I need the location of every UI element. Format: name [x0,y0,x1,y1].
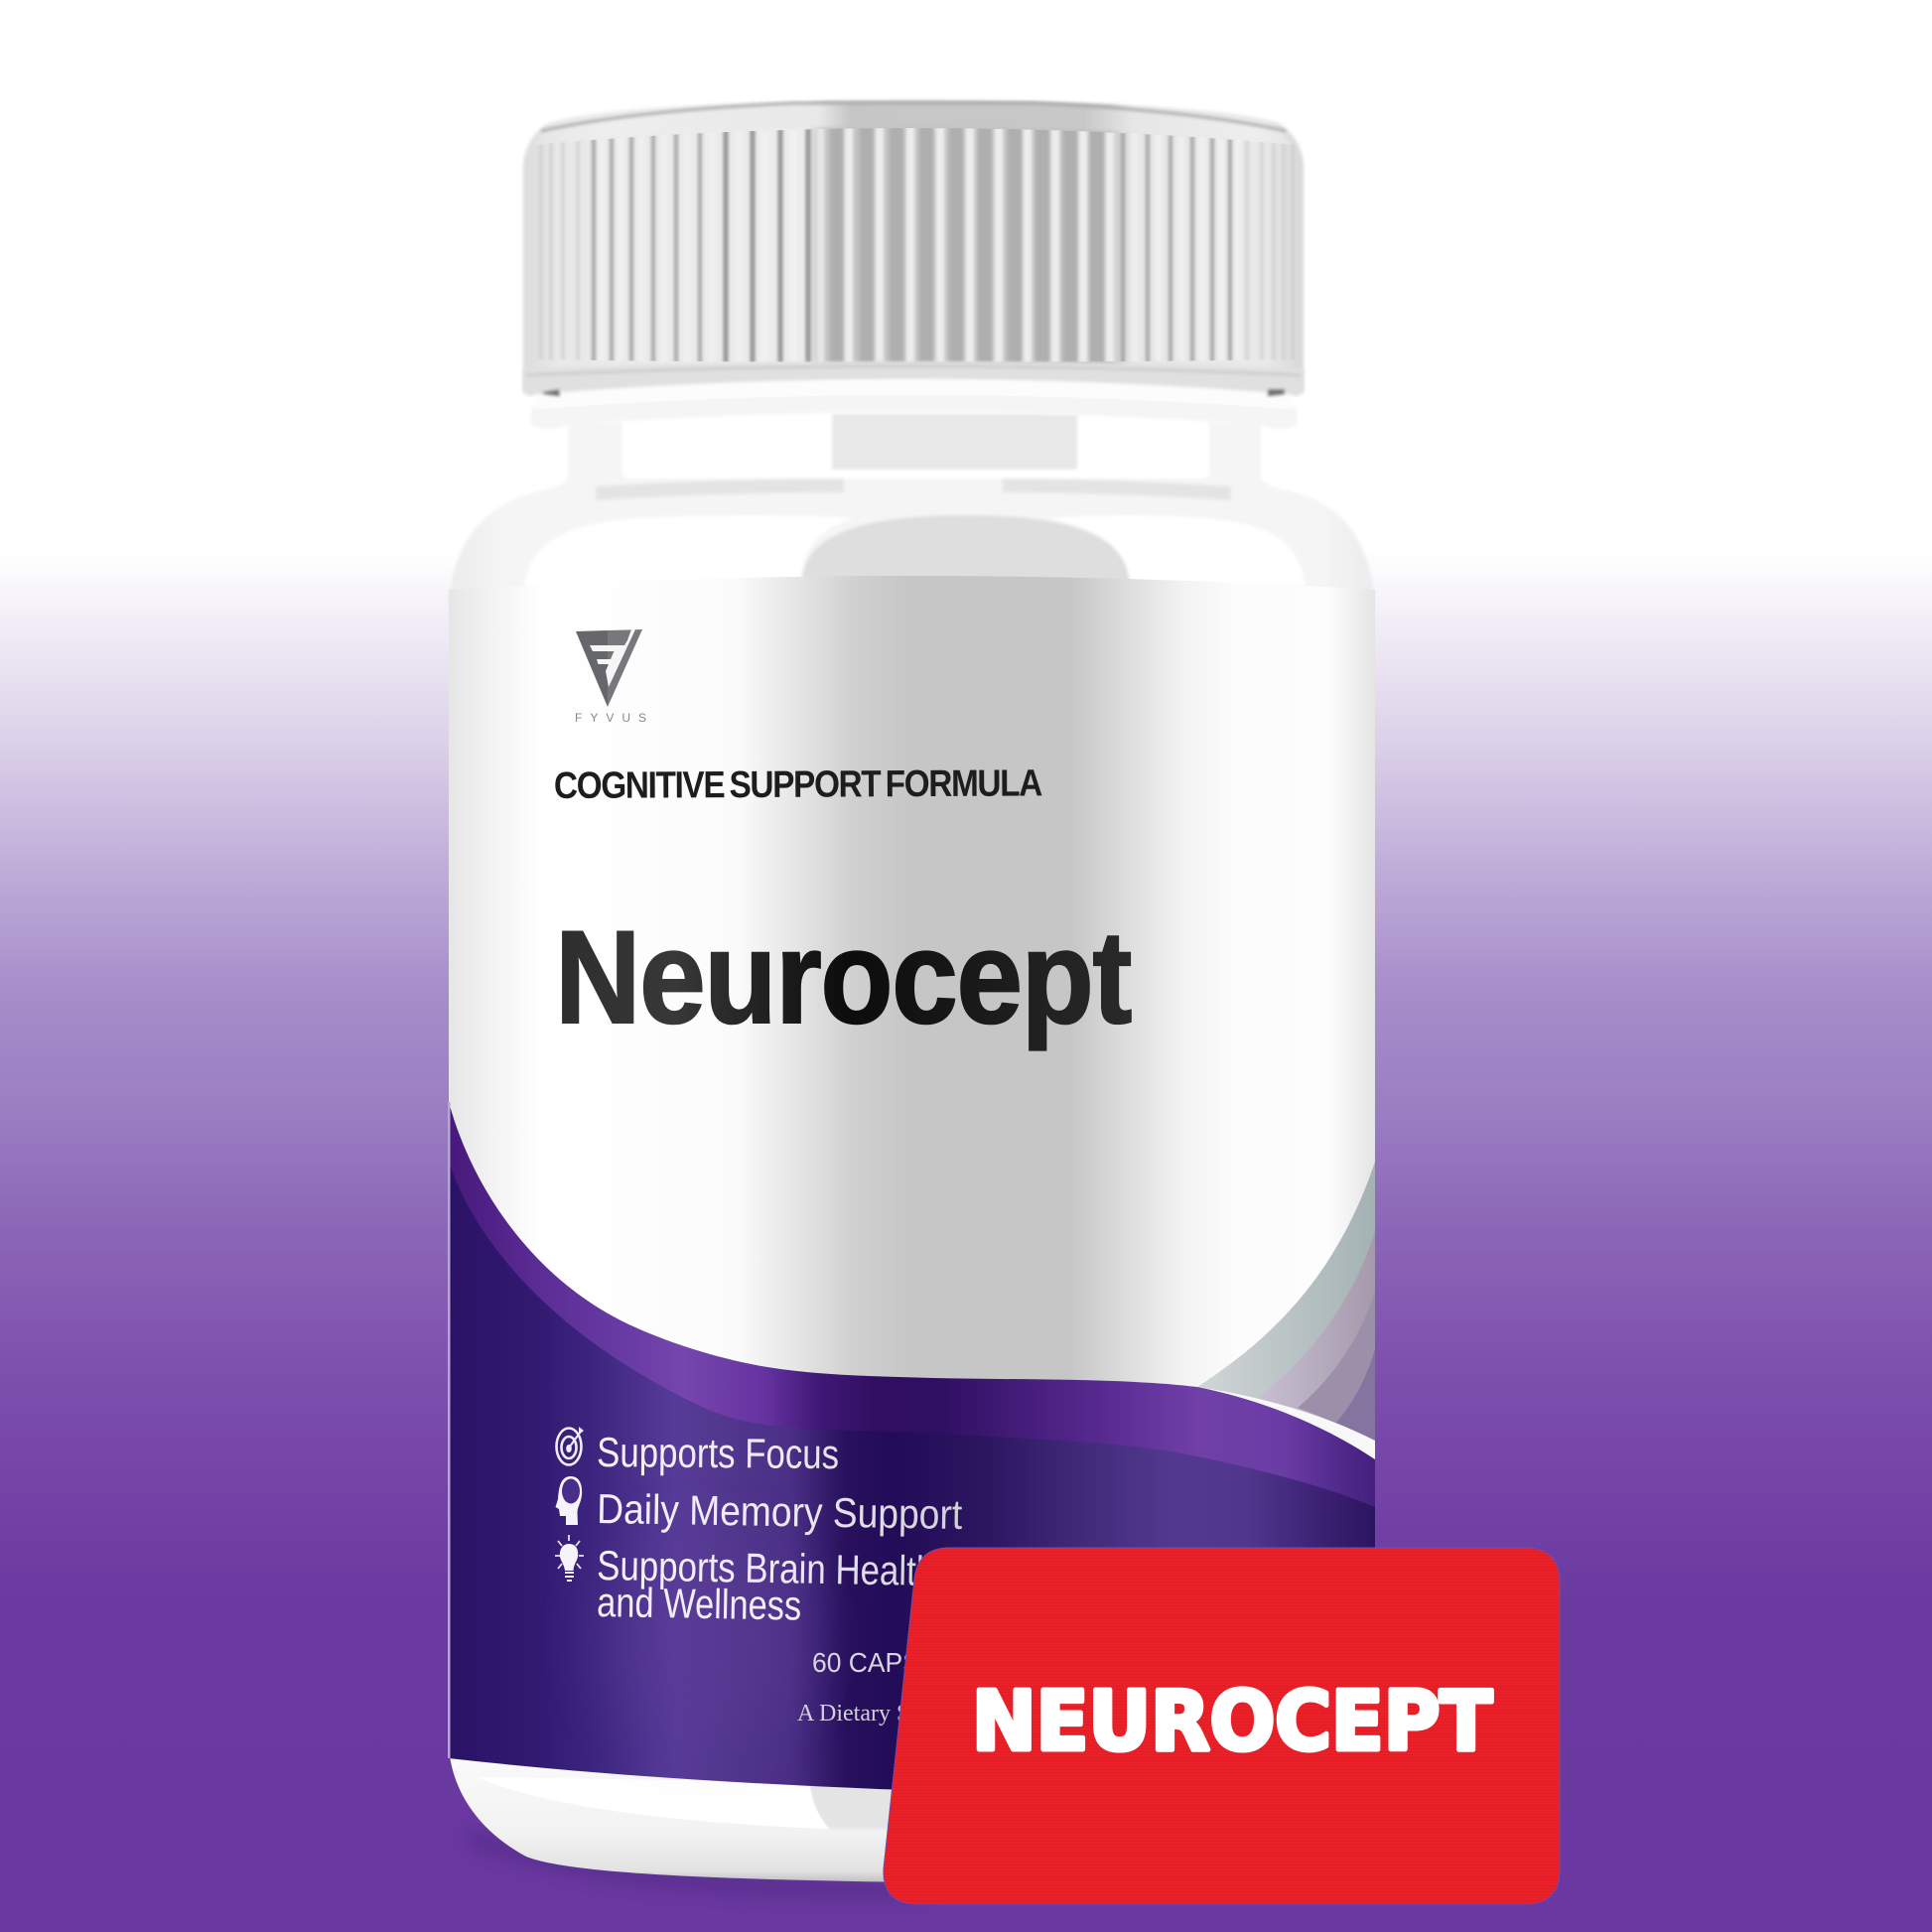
purple swoosh band [449,1102,1375,1588]
benefits list [555,1427,963,1629]
label left edge [448,1102,451,1758]
label centre glow [601,1539,809,1737]
white stripe [1197,1387,1375,1461]
bottle base [449,1747,1375,1883]
icon: head with brain [556,1476,582,1525]
cap top rim [536,102,1291,145]
icon: target [556,1427,584,1465]
benefit: memory: Daily Memory Support [597,1485,963,1538]
bottle floor shadow [467,1827,923,1898]
bottle shoulder and neck [449,414,1375,606]
dietary supplement note: A Dietary Supplement [797,1701,1011,1726]
cap ridges [539,128,1294,362]
logo wordmark: FYVUS [575,711,646,725]
benefit: brain health: Supports Brain Health [597,1542,936,1594]
brand logo [575,629,646,725]
bottle [449,99,1375,1898]
benefit: wellness: and Wellness [597,1579,802,1629]
card product name: NEUROCEPT [972,1675,1492,1769]
label panel [448,576,1375,1802]
screw cap [523,99,1304,396]
icon: light bulb [555,1535,584,1581]
benefit: focus: Supports Focus [597,1429,839,1477]
neck ring [531,391,1297,429]
product name: Neurocept [555,904,1131,1051]
red name card [884,1548,1560,1904]
card shape [884,1548,1560,1904]
grey-lilac corner wedges [1197,1162,1375,1445]
logo triangle [576,629,642,707]
formula heading: COGNITIVE SUPPORT FORMULA [554,762,1042,807]
dark purple panel [449,1162,1375,1802]
cap transparent collar [536,375,1291,409]
cap lower band [523,361,1304,396]
label white area [449,576,1375,1549]
capsule count: 60 CAPSULES [812,1647,989,1678]
